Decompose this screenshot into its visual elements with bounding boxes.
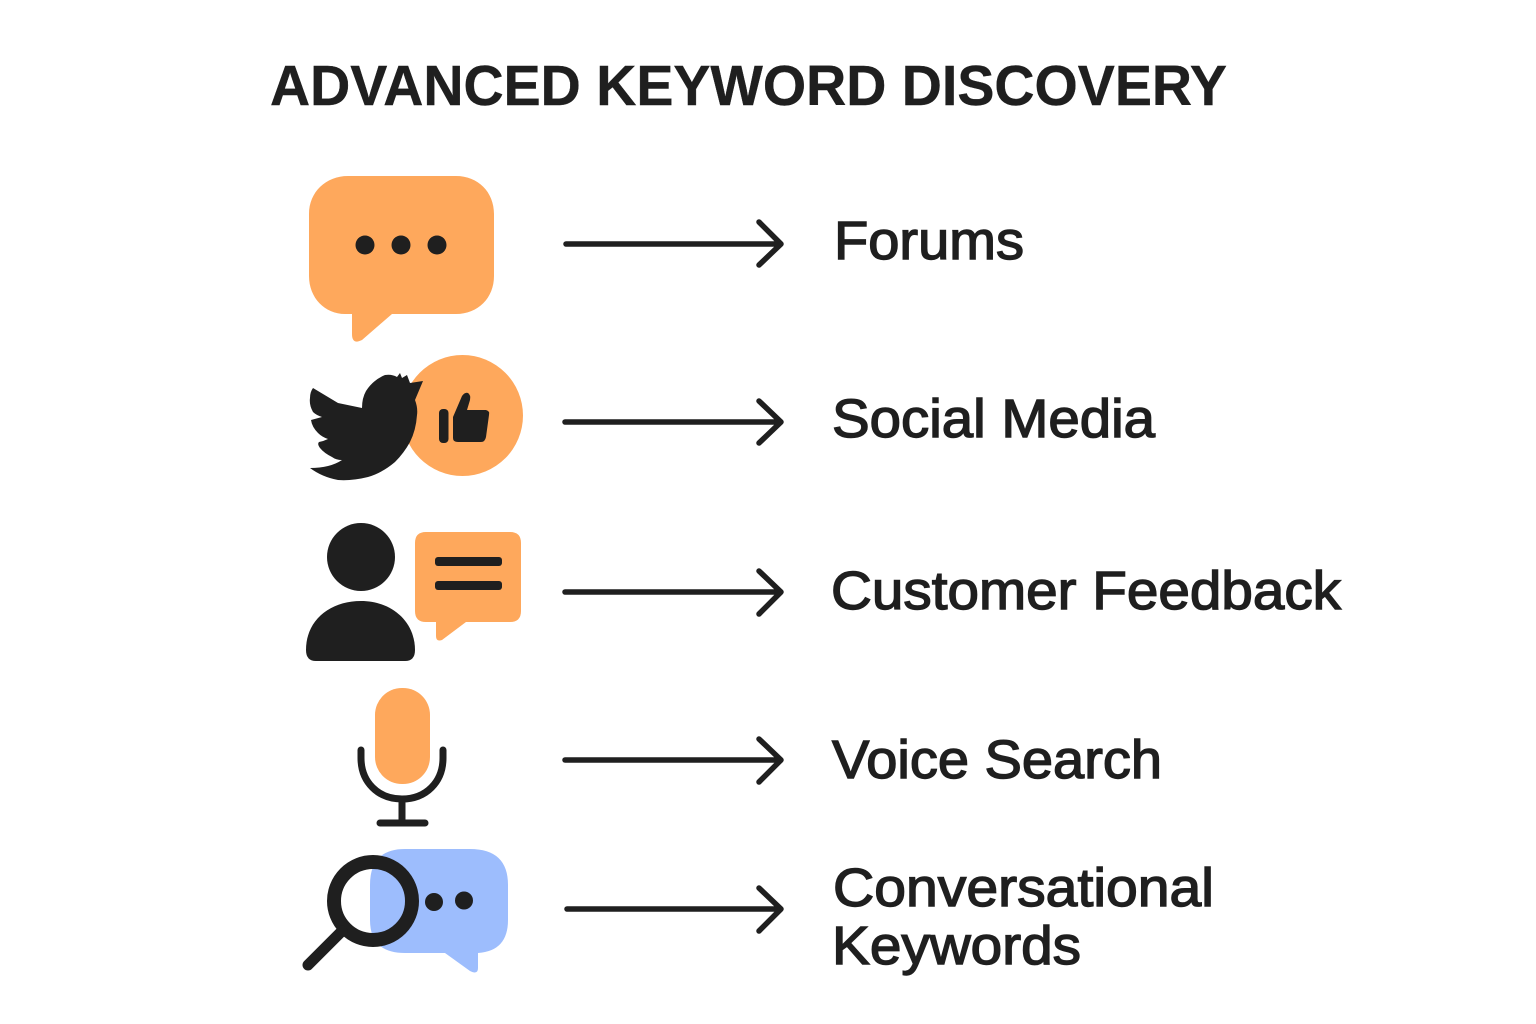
icon: orange feedback bubble xyxy=(415,532,521,640)
icon: orange circle with thumbs up xyxy=(402,355,523,476)
arrow xyxy=(567,888,781,931)
label: Customer Feedback: Customer Feedback xyxy=(831,561,1342,621)
label: Conversational Keywords: Conversational xyxy=(833,858,1214,918)
label: Social Media: Social Media xyxy=(832,389,1156,449)
arrow xyxy=(565,739,781,782)
row: customer feedback xyxy=(306,523,1342,661)
row: conversational keywords xyxy=(308,849,1214,976)
icon: bird xyxy=(310,373,423,480)
icon: person xyxy=(306,523,415,661)
arrow xyxy=(565,401,781,443)
label: Conversational Keywords: Keywords xyxy=(832,916,1081,976)
label: Voice Search: Voice Search xyxy=(832,730,1162,790)
arrow xyxy=(566,222,781,265)
row: voice search xyxy=(361,688,1162,823)
icon: microphone xyxy=(361,688,443,823)
row: forums xyxy=(309,176,1024,342)
icon: magnifying glass xyxy=(308,862,412,965)
row: social media xyxy=(310,355,1156,480)
title: ADVANCED KEYWORD DISCOVERY xyxy=(270,54,1227,118)
icon: orange speech bubble xyxy=(309,176,494,342)
icon: blue speech bubble xyxy=(370,849,508,972)
label: Conversational Keywords xyxy=(832,858,1214,976)
label: Forums: Forums xyxy=(834,211,1024,271)
arrow xyxy=(565,571,781,614)
